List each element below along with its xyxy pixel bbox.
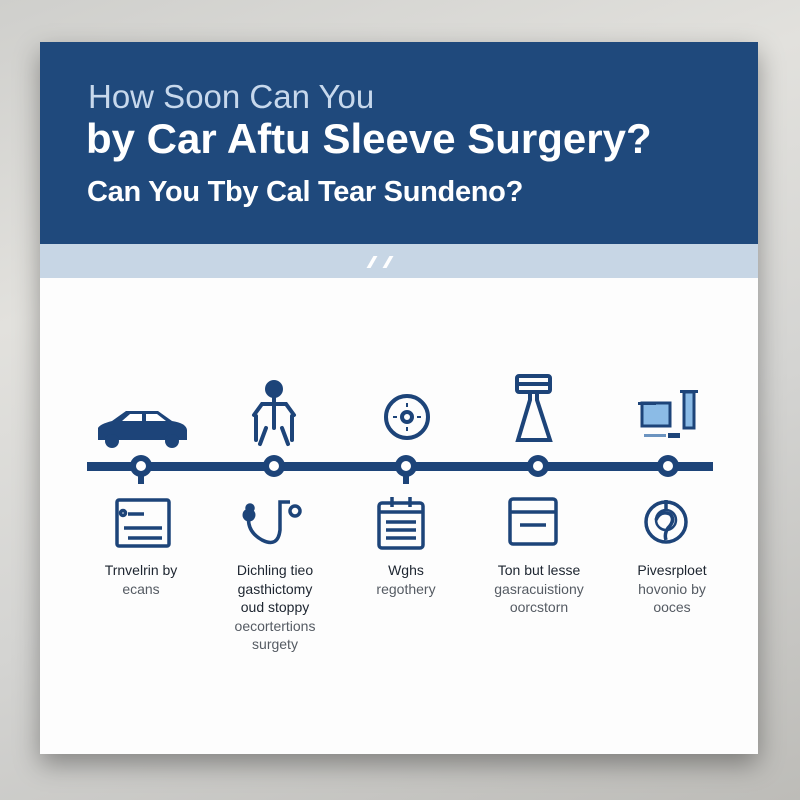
light strip with marks [40,244,758,278]
timeline line [87,455,713,484]
icon: equipment [638,390,698,438]
label 2 [235,562,315,652]
label 4: oorcstorn [510,599,568,615]
label 5: ooces [653,599,691,615]
label 4 [494,562,584,615]
label 2: oecortertions [235,618,315,634]
label 1: ecans [122,580,160,596]
label 2: Dichling tieo [237,562,313,578]
icon: target [646,500,686,542]
header band [40,42,758,244]
icon: document [117,500,169,546]
icon: stethoscope [244,502,300,542]
label 4: gasracuistiony [494,580,584,596]
label 5 [637,562,707,615]
label 3 [376,562,436,597]
icon: calendar [379,497,423,548]
label 4: Ton but lesse [498,562,580,578]
label 3: regothery [376,580,436,596]
label 2: surgety [252,636,298,652]
title line 1: How Soon Can You [88,78,374,115]
icon: dial [386,396,428,438]
labels [105,562,707,652]
label 5: hovonio by [638,580,706,596]
label 5: Pivesrploet [637,562,707,578]
card [40,42,758,754]
label 3: Wghs [388,562,424,578]
icon: car [98,411,187,448]
icon: hourglass [517,376,550,440]
label 2: gasthictomy [238,580,312,596]
subtitle: Can You Tby Cal Tear Sundeno? [87,176,523,208]
icon: card [510,499,556,544]
label 1 [105,562,178,596]
title line 2: by Car Aftu Sleeve Surgery? [86,115,652,162]
label 1: Trnvelrin by [105,562,177,578]
label 2: oud stoppy [241,599,309,615]
icon: person [254,382,294,444]
